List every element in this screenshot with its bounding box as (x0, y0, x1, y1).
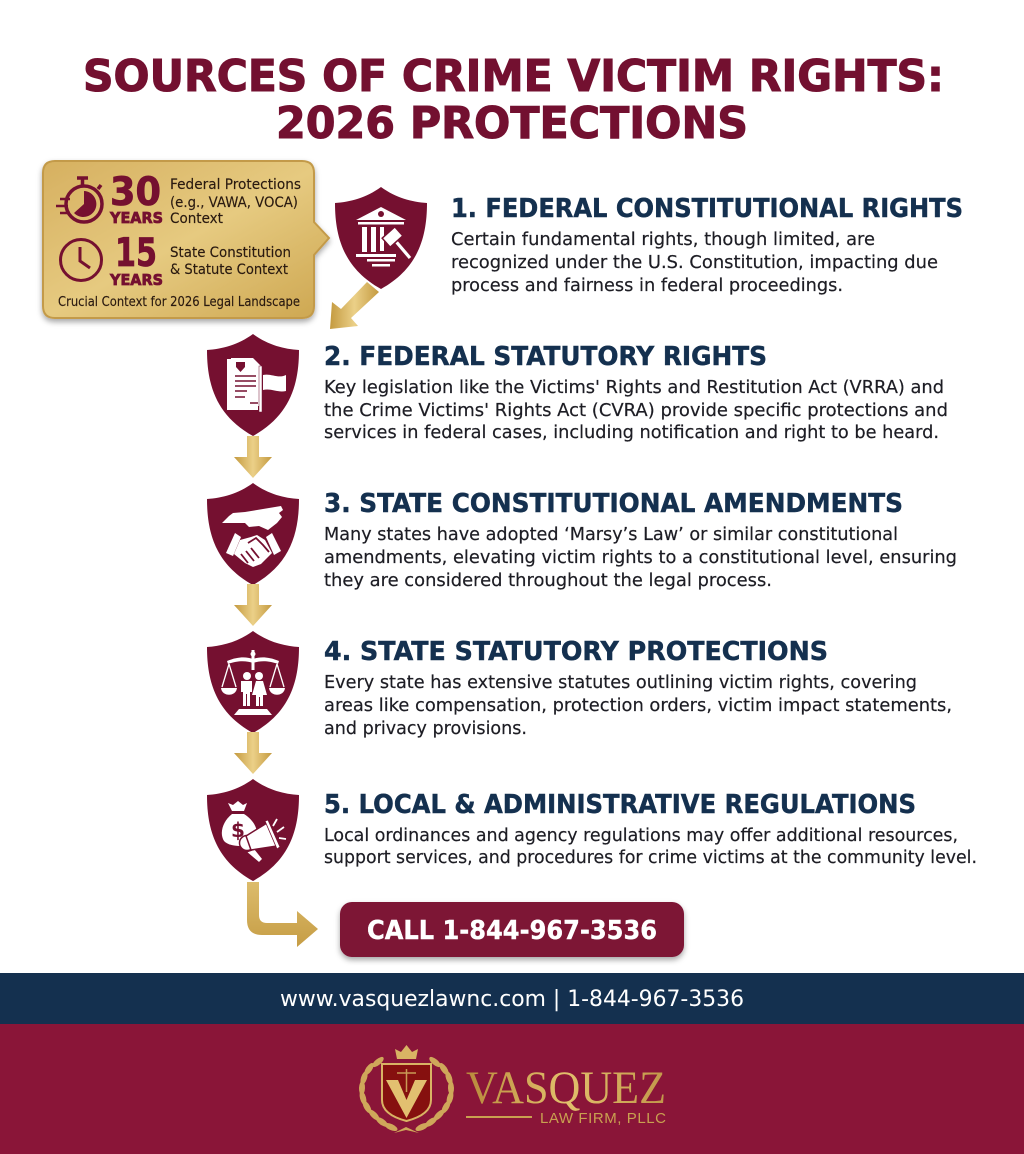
contact band: www.vasquezlawnc.com | 1-844-967-3536 (280, 987, 744, 1012)
heading: section 5: 5. LOCAL & ADMINISTRATIVE REGULATIONS (324, 790, 916, 820)
text: section 1 body: Certain fundamental rights, though limited, are (451, 229, 875, 250)
text: section 5 body: support services, and procedures for crime victims at the community level. (324, 847, 977, 868)
heading: section 2: 2. FEDERAL STATUTORY RIGHTS (324, 342, 767, 372)
text: section 2 body: services in federal cases, including notification and right to be heard. (324, 422, 939, 443)
icon: shield with state map and handshake (207, 483, 299, 585)
arrow: shield 3 to shield 4 (234, 584, 272, 626)
heading: section 1: 1. FEDERAL CONSTITUTIONAL RIGHTS (451, 194, 963, 224)
icon detail: megaphone (240, 820, 280, 863)
text: federal protections context: Context (170, 211, 223, 227)
icon: shield with money bag and megaphone: $ (231, 818, 245, 842)
text: section 3 body: Many states have adopted ‘Marsy’s Law’ or similar constitutional (324, 524, 898, 545)
stat: 30 years: 30 (110, 170, 161, 215)
title (83, 51, 944, 149)
panel: gold stats callout (43, 161, 329, 318)
stat: 15 years: YEARS (109, 271, 163, 289)
icon: shield with courthouse and gavel (335, 187, 427, 289)
stat: 30 years: YEARS (109, 209, 163, 227)
arrow: shield 5 to call button (247, 882, 318, 947)
text: federal protections context (170, 177, 301, 227)
title: 2026 PROTECTIONS (276, 98, 748, 149)
icon: shield with document and flag (207, 334, 299, 436)
text: section 5 body: Local ordinances and agency regulations may offer additional resources, (324, 825, 958, 846)
text: section 3 body: they are considered throughout the legal process. (324, 570, 772, 591)
logo: laurel wreath (358, 1055, 455, 1133)
icon: shield with scales and family (207, 631, 299, 733)
stat: 15 years (109, 231, 163, 289)
icon detail: gavel (382, 227, 410, 258)
button: call to action: CALL 1-844-967-3536 (367, 916, 657, 946)
text: section 1 body (451, 229, 938, 296)
text: section 4 body: areas like compensation, protection orders, victim impact statements, (324, 695, 952, 716)
text: section 3 body: amendments, elevating victim rights to a constitutional level, ensuring (324, 547, 957, 568)
footer panel (0, 1024, 1024, 1154)
arrow: shield 1 to shield 2 (330, 282, 379, 329)
contact band (0, 973, 1024, 1024)
logo: shield (382, 1064, 431, 1121)
heading: section 4: 4. STATE STATUTORY PROTECTIONS (324, 637, 828, 667)
text: section 2 body: Key legislation like the Victims' Rights and Restitution Act (VRRA) and (324, 377, 944, 398)
arrow: shield 4 to shield 5 (234, 732, 272, 774)
text: state constitution context (170, 245, 291, 278)
text: section 1 body: recognized under the U.S. Constitution, impacting due (451, 252, 938, 273)
button: call to action (340, 902, 684, 957)
text: section 2 body (324, 377, 948, 443)
text: section 3 body (324, 524, 957, 591)
text: section 4 body: and privacy provisions. (324, 718, 527, 739)
logo: wordmark: VASQUEZ (466, 1062, 666, 1114)
logo: tagline: LAW FIRM, PLLC (540, 1110, 666, 1127)
text: section 4 body: Every state has extensive statutes outlining victim rights, covering (324, 672, 917, 693)
arrow: shield 2 to shield 3 (234, 436, 272, 478)
text: section 1 body: process and fairness in federal proceedings. (451, 275, 843, 296)
text: state constitution context: & Statute Context (170, 262, 288, 278)
text: federal protections context: Federal Protections (170, 177, 301, 193)
text: section 4 body (324, 672, 952, 739)
heading: section 3: 3. STATE CONSTITUTIONAL AMENDMENTS (324, 489, 903, 519)
icon: stopwatch (56, 178, 102, 222)
text: section 2 body: the Crime Victims' Rights Act (CVRA) provide specific protections and (324, 400, 948, 421)
text: section 5 body (324, 825, 977, 868)
text: callout caption: Crucial Context for 2026 Legal Landscape (58, 295, 300, 310)
logo: Vasquez Law Firm (358, 1045, 666, 1133)
icon: shield with money bag and megaphone (207, 779, 299, 881)
logo: crown (395, 1045, 418, 1059)
text: federal protections context: (e.g., VAWA, VOCA) (170, 195, 298, 211)
title: SOURCES OF CRIME VICTIM RIGHTS: (83, 51, 944, 102)
icon: clock (60, 240, 102, 280)
stat: 15 years: 15 (115, 231, 157, 276)
text: state constitution context: State Constitution (170, 245, 291, 261)
